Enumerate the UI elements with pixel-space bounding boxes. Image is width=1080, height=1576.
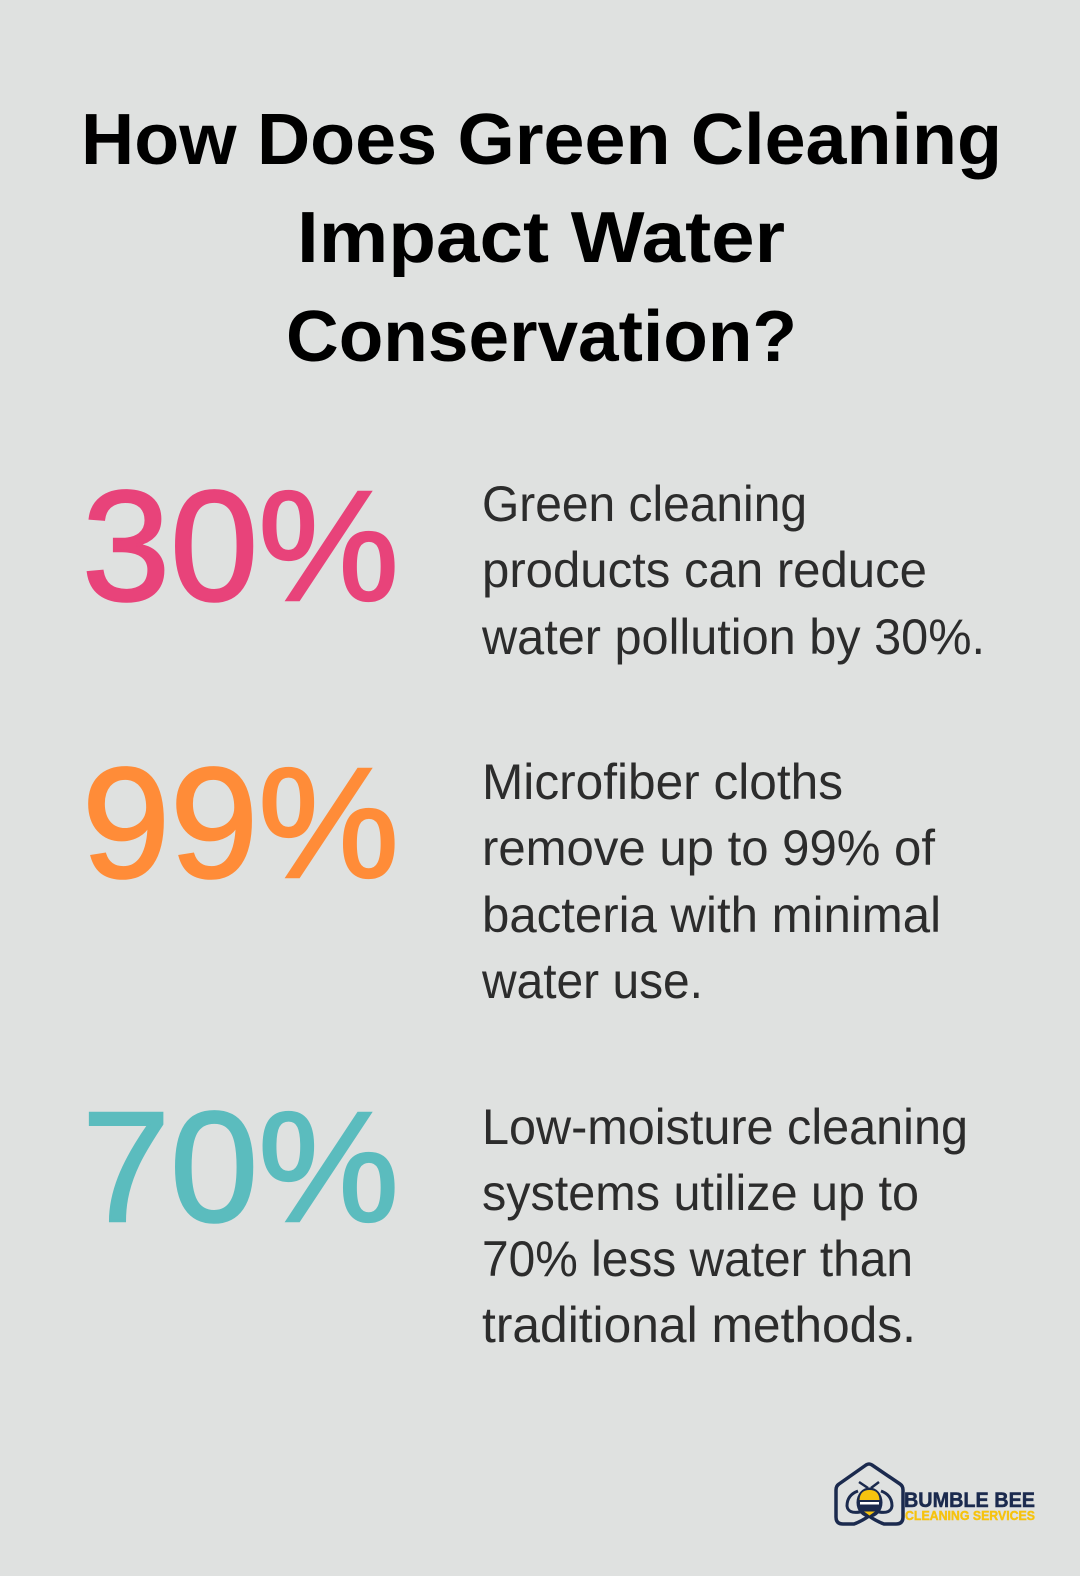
logo: Bumble Bee Cleaning Services: [836, 1464, 1035, 1524]
icon: bee in house: [836, 1464, 903, 1524]
text: 30% description: water pollution by 30%.: [481, 609, 985, 665]
text: 70% description: systems utilize up to: [482, 1165, 919, 1221]
text: 99% description: Microfiber cloths: [482, 754, 843, 810]
title: [81, 100, 1002, 377]
text: 70% description: Low-moisture cleaning: [482, 1099, 968, 1155]
text: 70% description: [482, 1099, 968, 1353]
stat: 70%: 70%: [82, 1080, 399, 1255]
stat: 99%: 99%: [82, 736, 399, 911]
text: 70% description: 70% less water than: [482, 1231, 913, 1287]
text: 99% description: [481, 754, 941, 1009]
text: 30% description: Green cleaning: [482, 476, 807, 532]
title: Conservation?: [286, 297, 797, 377]
text: 70% description: traditional methods.: [482, 1297, 916, 1353]
title: Impact Water: [297, 198, 785, 278]
logo wordmark: BUMBLE BEE: [904, 1489, 1035, 1512]
stat: 30%: 30%: [82, 459, 399, 634]
text: 30% description: products can reduce: [482, 542, 927, 598]
title: How Does Green Cleaning: [81, 100, 1002, 180]
text: 30% description: [481, 476, 985, 665]
text: 99% description: remove up to 99% of: [482, 820, 935, 876]
logo tagline: CLEANING SERVICES: [905, 1509, 1035, 1523]
text: 99% description: bacteria with minimal: [482, 887, 941, 943]
text: 99% description: water use.: [481, 953, 703, 1009]
